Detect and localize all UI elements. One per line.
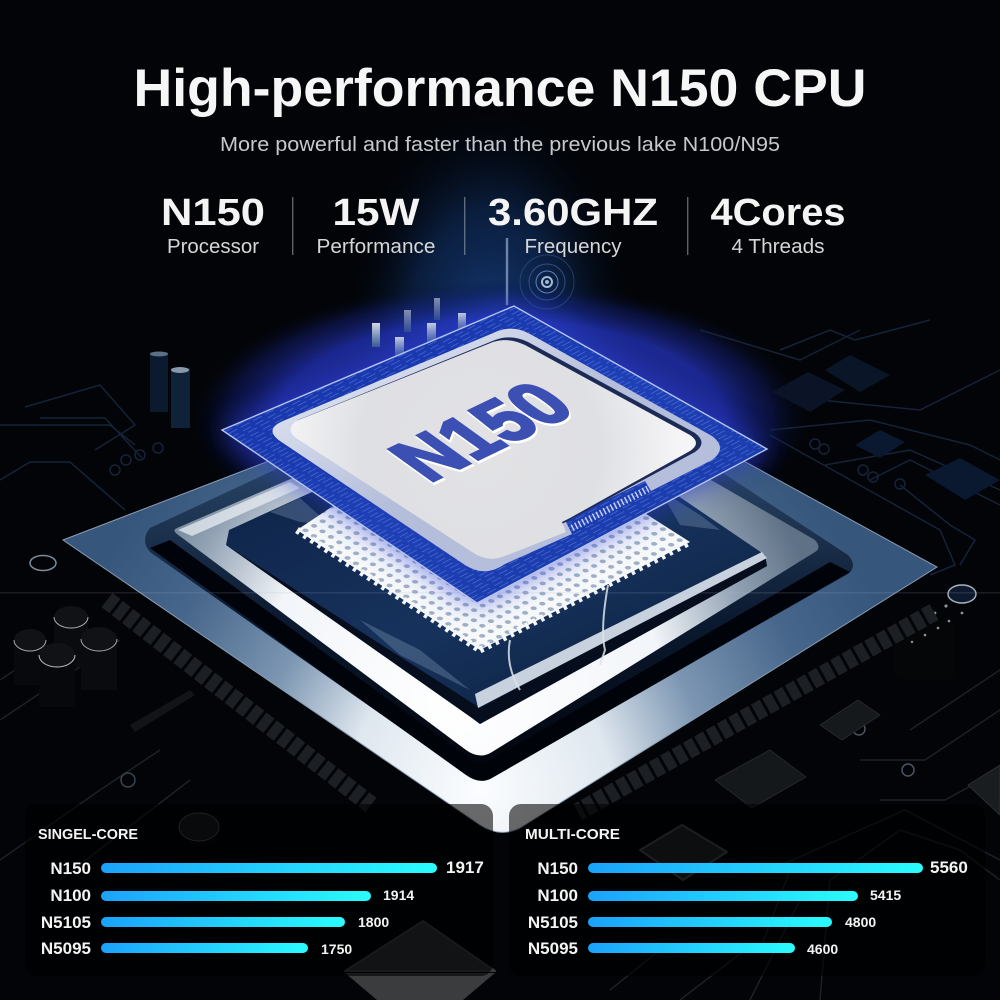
chip substrate	[222, 306, 767, 603]
die glass edge	[475, 552, 767, 708]
panel: multi-core	[509, 804, 985, 976]
spec: cores	[710, 192, 846, 258]
black channel lower shadow	[150, 540, 850, 781]
row N100: 5415	[870, 887, 901, 903]
outer frame	[63, 437, 937, 832]
notch contact stripes	[572, 489, 648, 528]
CPU package	[0, 400, 1000, 832]
spec row	[161, 192, 846, 258]
chip glow	[222, 306, 767, 603]
lattice comb edges	[297, 530, 690, 650]
divider	[464, 197, 465, 255]
spec: power: 15W	[332, 192, 420, 234]
solder lattice	[297, 506, 690, 650]
row N5105	[528, 913, 876, 932]
row N100	[50, 886, 414, 905]
row N150: 1917	[446, 858, 484, 877]
row N150	[537, 858, 968, 878]
title: High-performance N150 CPU	[134, 59, 866, 118]
row N100	[537, 886, 901, 905]
row N100: N100	[537, 886, 578, 905]
dark inset line	[292, 337, 702, 557]
row N150: 5560	[930, 858, 968, 877]
lower circuit traces	[0, 640, 1000, 1000]
circuit chips	[130, 355, 1000, 1000]
row N100: 1914	[383, 887, 414, 903]
chip label shadow: N150	[372, 372, 593, 495]
die block	[226, 470, 767, 724]
chip face	[290, 340, 696, 559]
row N150	[50, 858, 484, 878]
row N5095: N5095	[41, 939, 91, 958]
spec: frequency: 3.60GHZ	[488, 192, 658, 234]
divider	[687, 197, 688, 255]
panel heading: SINGEL-CORE	[38, 826, 138, 843]
highlight band on bright frame left	[178, 482, 300, 536]
capacitors	[14, 556, 976, 845]
panel heading: MULTI-CORE	[525, 826, 620, 843]
row N5095	[528, 939, 838, 958]
metal ring	[272, 329, 720, 571]
spec: power	[316, 192, 436, 258]
row N5105: 4800	[845, 914, 876, 930]
row N5095: 1750	[321, 941, 352, 957]
row N100: N100	[50, 886, 91, 905]
die side shadow	[226, 545, 767, 724]
spec: processor: N150	[161, 192, 265, 234]
subtitle: More powerful and faster than the previous lake N100/N95	[220, 134, 780, 156]
panel: single-core	[25, 804, 493, 976]
spec: frequency	[488, 192, 658, 258]
spec: cores: 4 Threads	[732, 236, 824, 258]
row N5105	[41, 913, 389, 932]
package pins	[107, 600, 934, 812]
sparkle dots	[896, 604, 963, 643]
row N5105: 1800	[358, 914, 389, 930]
row N5105: N5105	[41, 913, 91, 932]
spec: processor: Processor	[167, 236, 259, 258]
row N5095: 4600	[807, 941, 838, 957]
row N5095	[41, 939, 352, 958]
lens flare	[0, 592, 1000, 594]
beam and signal target	[507, 238, 574, 309]
spec: power: Performance	[316, 236, 436, 258]
divider	[292, 197, 293, 255]
spec: processor	[161, 192, 265, 258]
row N150: N150	[50, 859, 91, 878]
spec: cores: 4Cores	[710, 192, 846, 234]
spec: frequency: Frequency	[524, 236, 622, 258]
dark channel	[145, 458, 853, 779]
die streaks	[270, 490, 720, 690]
wires	[509, 585, 608, 690]
floating N150 chip	[222, 306, 767, 603]
row N5095: N5095	[528, 939, 578, 958]
cylinders above the chip	[150, 298, 466, 428]
circuit board traces	[0, 320, 1000, 575]
bright inner frame	[174, 462, 818, 756]
row N5105: N5105	[528, 913, 578, 932]
chip label: N150	[371, 370, 592, 493]
row N150: N150	[537, 859, 578, 878]
